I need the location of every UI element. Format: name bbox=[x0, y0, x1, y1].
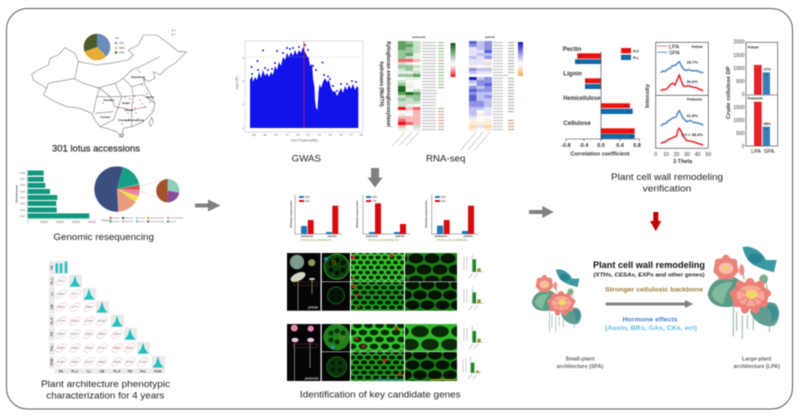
bar chart: expression gene 3: SPA bbox=[441, 196, 446, 199]
bar chart: expression gene 3: XTH34 (LOC104598180) bbox=[436, 238, 468, 242]
panel: GWAS manhattan plot: 76 bbox=[339, 133, 343, 137]
bar chart: variants per chromosome: Chr3 bbox=[20, 202, 26, 206]
panel: GWAS manhattan plot: 73 bbox=[306, 133, 310, 137]
province labels: Yunnan bbox=[100, 115, 110, 119]
correlation values: 0.64** bbox=[58, 293, 64, 296]
bar chart: variants per chromosome: Chr7 bbox=[20, 178, 26, 181]
pie legend bbox=[101, 217, 183, 222]
line chart: XRD crystallinity: 0 bbox=[654, 152, 657, 158]
correlation values: 0.48** bbox=[58, 347, 64, 350]
bar chart: expression gene 2: SPA bbox=[372, 196, 377, 199]
panel: GWAS manhattan plot: 77 bbox=[349, 133, 353, 137]
bar chart: correlation coefficients: 0.0 bbox=[597, 143, 605, 149]
bar chart: crude cellulose DP: 500 bbox=[736, 79, 745, 85]
panel: plant cell wall remodeling verification bbox=[561, 40, 778, 195]
illustration: large lotus plant bbox=[708, 247, 779, 338]
panel: GWAS manhattan plot bbox=[235, 41, 363, 142]
correlation values: 0.55** bbox=[72, 361, 78, 364]
heading: 301 lotus accessions: 301 lotus accessions bbox=[52, 144, 140, 154]
province labels: Guangxi bbox=[118, 118, 130, 122]
province labels: Guangdong bbox=[128, 118, 144, 122]
bar chart: correlation coefficients: ** bbox=[579, 54, 582, 58]
panel: GWAS manhattan plot: 69 bbox=[263, 133, 267, 137]
line chart: XRD crystallinity: SPA bbox=[669, 51, 680, 57]
bar chart: correlation coefficients: Pectin bbox=[563, 46, 581, 53]
heading: plant architecture phenotypic characterization: Plant architecture phenotypic bbox=[41, 379, 170, 390]
bar chart: correlation coefficients: PLF bbox=[633, 50, 639, 54]
pie legend: MPA bbox=[119, 46, 125, 50]
correlation values: 0.66** bbox=[86, 347, 92, 350]
heading: RNA-seq: RNA-seq bbox=[426, 154, 465, 164]
bar chart: expression gene 3: Relative expression bbox=[424, 200, 428, 228]
axis labels: PL-F bbox=[50, 317, 54, 325]
correlation values: 0.85** bbox=[86, 306, 92, 309]
panel: RNA-seq heatmaps: peduncle bbox=[412, 35, 426, 39]
bar chart: crude cellulose DP: 2000 bbox=[733, 40, 745, 46]
correlation values: 0.73** bbox=[127, 361, 133, 364]
line chart: XRD crystallinity: 18.7% bbox=[686, 60, 698, 64]
correlation values: 0.67** bbox=[86, 361, 92, 364]
axis labels: PeW bbox=[50, 359, 54, 365]
axis labels: FD bbox=[128, 370, 133, 374]
bar chart: expression gene 1: XTH32 (LOC104598178) bbox=[300, 238, 332, 242]
bar chart: correlation coefficients: PLL bbox=[633, 56, 639, 60]
bar chart: variants per chromosome: Chromosome bbox=[14, 185, 18, 203]
pie: detail breakdown bbox=[156, 179, 179, 202]
micrographs: peduncle bbox=[287, 324, 457, 381]
bar chart: crude cellulose DP: 500 bbox=[736, 131, 745, 137]
bar chart: crude cellulose DP: 1500 bbox=[733, 105, 745, 111]
panel: phenotype correlation matrix: characterization for 4 years bbox=[46, 390, 165, 402]
gene family label: hydrolases (MoXTH) bbox=[378, 62, 384, 107]
gene family label bbox=[378, 41, 391, 128]
bar chart: variants per chromosome bbox=[14, 169, 98, 224]
gene list: (XTHs, CESAs, EXPs and other genes) bbox=[594, 272, 705, 278]
province labels: Hunan bbox=[125, 108, 134, 112]
bar chart: expression gene 1: LPA bbox=[305, 200, 310, 203]
line chart: XRD crystallinity: LPA bbox=[669, 44, 679, 50]
correlation values: 0.56** bbox=[99, 333, 105, 336]
bar chart: crude cellulose DP: 0 bbox=[742, 144, 745, 150]
axis labels: PA bbox=[50, 265, 54, 270]
correlation values: 0.71** bbox=[99, 347, 105, 350]
correlation ellipses bbox=[54, 275, 150, 368]
panel: genomic resequencing bbox=[14, 166, 183, 243]
bar chart: correlation coefficients: ** bbox=[630, 130, 633, 134]
province labels: Hubei bbox=[122, 101, 130, 105]
bar chart: correlation coefficients: ** bbox=[577, 60, 580, 64]
line chart: XRD crystallinity: Intensity bbox=[645, 83, 651, 108]
province labels: Anhui bbox=[146, 95, 154, 99]
hormone heading: Hormone effects bbox=[622, 316, 678, 324]
bar chart: expression gene 2: petiole bbox=[395, 234, 405, 238]
bar chart: expression gene 1: Relative expression bbox=[289, 200, 293, 228]
pie: variant annotation bbox=[94, 166, 140, 212]
bar chart: crude cellulose DP: Crude cellulose DP bbox=[726, 66, 732, 119]
bar chart: variants per chromosome: Chr6 bbox=[20, 184, 26, 187]
line chart: XRD crystallinity: 10 bbox=[663, 152, 669, 158]
correlation values: 0.5** bbox=[58, 280, 64, 283]
line chart: XRD crystallinity: 31.8% bbox=[686, 113, 698, 118]
bar chart: expression gene 2: LPA bbox=[372, 200, 377, 203]
panel: GWAS manhattan plot: Chr2 Position(Mb) bbox=[290, 138, 318, 142]
bar chart: correlation coefficients: -0.4 bbox=[579, 143, 588, 149]
bar chart: variants per chromosome: Chr4 bbox=[20, 196, 26, 200]
bar chart: crude cellulose DP: -68% bbox=[763, 122, 771, 126]
arrow: down to candidate genes bbox=[368, 168, 382, 188]
pie legend: Category bbox=[101, 219, 112, 222]
heading: genomic resequencing: Genomic resequencing bbox=[53, 232, 154, 243]
panel: GWAS manhattan plot: 72 bbox=[296, 133, 300, 137]
pie: accession classes bbox=[84, 34, 110, 60]
line chart: XRD crystallinity: 30 bbox=[684, 152, 690, 158]
bar chart: variants per chromosome: 600000 bbox=[72, 221, 81, 224]
axis labels: LW bbox=[100, 370, 104, 374]
bar chart: crude cellulose DP: ** bbox=[765, 128, 768, 132]
bar chart: correlation coefficients: Cellulose bbox=[563, 120, 591, 127]
bar chart: variants per chromosome: 0 bbox=[27, 221, 29, 224]
bar chart: crude cellulose DP: Peduncle bbox=[748, 96, 763, 100]
panel: GWAS manhattan plot: 4 bbox=[242, 79, 244, 83]
micrographs: petiole bbox=[287, 253, 457, 311]
axis labels: FD bbox=[50, 331, 54, 336]
bar chart: expression gene 2: XTH33 (LOC104598179) bbox=[367, 238, 399, 242]
correlation values: 0.92** bbox=[72, 320, 78, 323]
micrographs: petiole: petiole bbox=[308, 306, 318, 310]
line chart: XRD crystallinity: 50 bbox=[705, 152, 711, 158]
map legend bbox=[172, 30, 176, 35]
pie legend: LPA bbox=[119, 41, 124, 45]
panel: RNA-seq heatmaps bbox=[378, 35, 523, 150]
label: large-plant architecture: architecture (LPA) bbox=[734, 364, 780, 370]
bar chart: expression gene 3 bbox=[424, 195, 478, 242]
arrow: small to large plant bbox=[606, 300, 693, 308]
gene labels: peduncle bbox=[392, 42, 444, 146]
panel: 301 lotus accessions bbox=[32, 30, 187, 154]
axis labels: PA bbox=[59, 370, 64, 374]
bar chart: expression gene 3: peduncle bbox=[435, 234, 448, 238]
axis labels: PL-L bbox=[50, 277, 54, 285]
label: small-plant architecture: architecture (SPA) bbox=[557, 364, 604, 370]
bar chart: expression gene 2: peduncle bbox=[366, 234, 379, 238]
correlation values: 0.60** bbox=[58, 306, 64, 309]
label: large-plant architecture: Large-plant bbox=[742, 356, 771, 362]
bar chart: expression gene 2: Relative expression bbox=[355, 200, 359, 228]
pie legend: DA bbox=[115, 36, 119, 40]
bar chart: variants per chromosome: Chr8 bbox=[20, 172, 26, 175]
bar chart: expression gene 1 bbox=[289, 195, 342, 242]
correlation values: 0.58** bbox=[72, 347, 78, 350]
bar chart: correlation coefficients: Lignin bbox=[563, 70, 582, 78]
panel: RNA-seq heatmaps: petiole bbox=[485, 35, 495, 39]
bar chart: correlation coefficients: 0.4 bbox=[616, 143, 624, 149]
panel: GWAS manhattan plot: 78 bbox=[359, 133, 363, 137]
bar chart: expression gene 1: peduncle bbox=[301, 234, 314, 238]
bar chart: crude cellulose DP: ** bbox=[765, 74, 768, 78]
bar chart: variants per chromosome: Chr5 bbox=[20, 190, 26, 194]
panel: remodeling model bbox=[532, 247, 780, 370]
province labels bbox=[100, 75, 154, 122]
correlation values: 0.67** bbox=[72, 333, 78, 336]
remodeling heading: Plant cell wall remodeling bbox=[593, 260, 705, 271]
bar chart: variants per chromosome: 800000 bbox=[88, 221, 97, 224]
colour scale: petiole bbox=[518, 42, 523, 76]
province labels: Shandong bbox=[131, 75, 145, 79]
bar chart: correlation coefficients: ** bbox=[628, 110, 631, 114]
line chart: XRD crystallinity: 30.6% bbox=[686, 79, 698, 84]
line chart: XRD crystallinity: 2-Theta bbox=[673, 159, 693, 165]
correlation values: 0.79** bbox=[140, 361, 146, 364]
mini bar charts: cell wall signal bbox=[463, 255, 483, 379]
heading: GWAS: GWAS bbox=[292, 154, 321, 164]
arrow: to cell wall verification bbox=[529, 206, 554, 218]
bar chart: crude cellulose DP: 1500 bbox=[733, 53, 745, 59]
bar chart: correlation coefficients: * bbox=[586, 86, 588, 90]
bar chart: crude cellulose DP: Petiole bbox=[748, 46, 759, 50]
line chart: XRD crystallinity: CrI = 38.4% bbox=[682, 132, 703, 137]
panel: GWAS manhattan plot: 74 bbox=[317, 133, 321, 137]
bar chart: crude cellulose DP: 0 bbox=[742, 92, 745, 98]
panel: GWAS manhattan plot: 70 bbox=[274, 133, 278, 137]
axis labels: LL bbox=[87, 370, 91, 374]
micrographs: peduncle: peduncle bbox=[305, 376, 319, 380]
correlation values: 0.61** bbox=[114, 333, 120, 336]
correlation values: 0.7** bbox=[72, 293, 78, 296]
axis labels bbox=[50, 265, 161, 374]
heatmap: petiole bbox=[469, 41, 492, 131]
arrow: to GWAS and RNA-seq bbox=[195, 200, 220, 212]
correlation values: 0.53** bbox=[114, 361, 120, 364]
correlation values: 0.73** bbox=[99, 320, 105, 323]
accession dots bbox=[102, 71, 153, 125]
bar chart: correlation coefficients: -0.8 bbox=[561, 143, 571, 149]
axis labels: PeW bbox=[155, 370, 161, 374]
panel: GWAS manhattan plot: 6 bbox=[242, 56, 244, 60]
panel: GWAS manhattan plot: 75 bbox=[328, 133, 332, 137]
bar chart: variants per chromosome: 200000 bbox=[40, 221, 49, 224]
axis labels: PL-F bbox=[113, 370, 121, 374]
line chart: XRD crystallinity: 20 bbox=[674, 152, 679, 158]
panel: GWAS manhattan plot: 71 bbox=[285, 133, 289, 137]
panel: identification of key candidate genes bbox=[287, 195, 483, 401]
heading: plant cell wall remodeling verification: Plant cell wall remodeling bbox=[611, 172, 723, 183]
bar chart: correlation coefficients: ** bbox=[625, 104, 628, 108]
panel: GWAS manhattan plot: 68 bbox=[252, 133, 256, 137]
panel: GWAS manhattan plot: 0 bbox=[242, 126, 244, 130]
correlation values: 0.60** bbox=[86, 333, 92, 336]
line chart: XRD crystallinity: Peduncle bbox=[687, 98, 702, 102]
bar chart: variants per chromosome: Chr2 bbox=[20, 209, 26, 212]
bar chart: expression gene 1: SPA bbox=[305, 196, 310, 199]
outlier points bbox=[250, 44, 357, 92]
panel: GWAS manhattan plot: 2 bbox=[242, 102, 244, 106]
bar chart: expression gene 2 bbox=[355, 195, 410, 242]
bar chart: crude cellulose DP bbox=[726, 40, 778, 155]
line chart: XRD crystallinity bbox=[645, 42, 711, 165]
map of China bbox=[32, 35, 187, 137]
panel: plant cell wall remodeling verification: verification bbox=[643, 184, 691, 195]
correlation values: 0.43** bbox=[58, 361, 64, 364]
bar chart: expression gene 3: LPA bbox=[441, 200, 446, 203]
gene labels: petiole bbox=[461, 42, 514, 150]
bar chart: expression gene 1: petiole bbox=[327, 234, 337, 238]
bar chart: crude cellulose DP: 1000 bbox=[733, 118, 745, 124]
correlation values: 0.62** bbox=[58, 333, 64, 336]
axis labels: PeL bbox=[50, 345, 54, 351]
heatmap: peduncle bbox=[398, 41, 420, 131]
bar chart: crude cellulose DP: 1000 bbox=[733, 66, 745, 72]
bar chart: correlation coefficients: 0.8 bbox=[633, 143, 641, 149]
panel: phenotype correlation matrix bbox=[41, 261, 170, 402]
bar chart: crude cellulose DP: -27% bbox=[763, 68, 771, 72]
illustration: small lotus plant bbox=[532, 269, 581, 333]
backbone effect: Stronger cellulosic backbone bbox=[605, 286, 703, 294]
pie legend: SPA bbox=[119, 50, 125, 54]
pie legend bbox=[115, 36, 125, 54]
heading: identification of key candidate genes: Identification of key candidate genes bbox=[300, 390, 461, 401]
colour scale: peduncle bbox=[450, 43, 456, 77]
bar chart: correlation coefficients: Correlation coefficient bbox=[570, 152, 630, 158]
correlation values bbox=[58, 280, 146, 364]
arrow: down to model bbox=[650, 212, 661, 231]
correlation values: 0.7** bbox=[72, 306, 78, 309]
line chart: XRD crystallinity: Petiole bbox=[692, 45, 703, 49]
bar chart: crude cellulose DP: LPA bbox=[751, 149, 761, 155]
province labels: Sichuan bbox=[104, 98, 115, 102]
hormone list: (Auxin, BRs, GAs, CKs, ect) bbox=[605, 325, 697, 332]
bar chart: expression gene 3: petiole bbox=[463, 234, 473, 238]
label: small-plant architecture: Small-plant bbox=[565, 356, 595, 362]
correlation values: 0.84** bbox=[127, 347, 133, 350]
bar chart: correlation coefficients: * bbox=[586, 80, 588, 84]
bar chart: variants per chromosome: 400000 bbox=[56, 221, 65, 224]
axis labels: LW bbox=[50, 305, 54, 309]
correlation values: 0.77** bbox=[58, 320, 64, 323]
bar chart: correlation coefficients bbox=[561, 46, 641, 158]
line chart: XRD crystallinity: 40 bbox=[695, 152, 700, 158]
correlation values: 0.56** bbox=[99, 361, 105, 364]
correlation values: 0.66** bbox=[114, 347, 120, 350]
axis labels: PeL bbox=[140, 370, 146, 374]
panel: GWAS manhattan plot: -log10(P) bbox=[235, 76, 239, 90]
bar chart: crude cellulose DP: SPA bbox=[764, 149, 775, 155]
bar chart: correlation coefficients: Hemicellulose bbox=[563, 95, 601, 102]
gene family label: Xyloglucan endotransglucosylase/ bbox=[385, 41, 391, 128]
distribution plots bbox=[56, 262, 164, 368]
correlation values: 0.74** bbox=[86, 320, 92, 323]
bar chart: correlation coefficients: ** bbox=[630, 135, 633, 139]
bar chart: variants per chromosome: Chr1 bbox=[20, 215, 26, 218]
axis labels: PL-L bbox=[71, 370, 79, 374]
axis labels: LL bbox=[50, 292, 54, 296]
